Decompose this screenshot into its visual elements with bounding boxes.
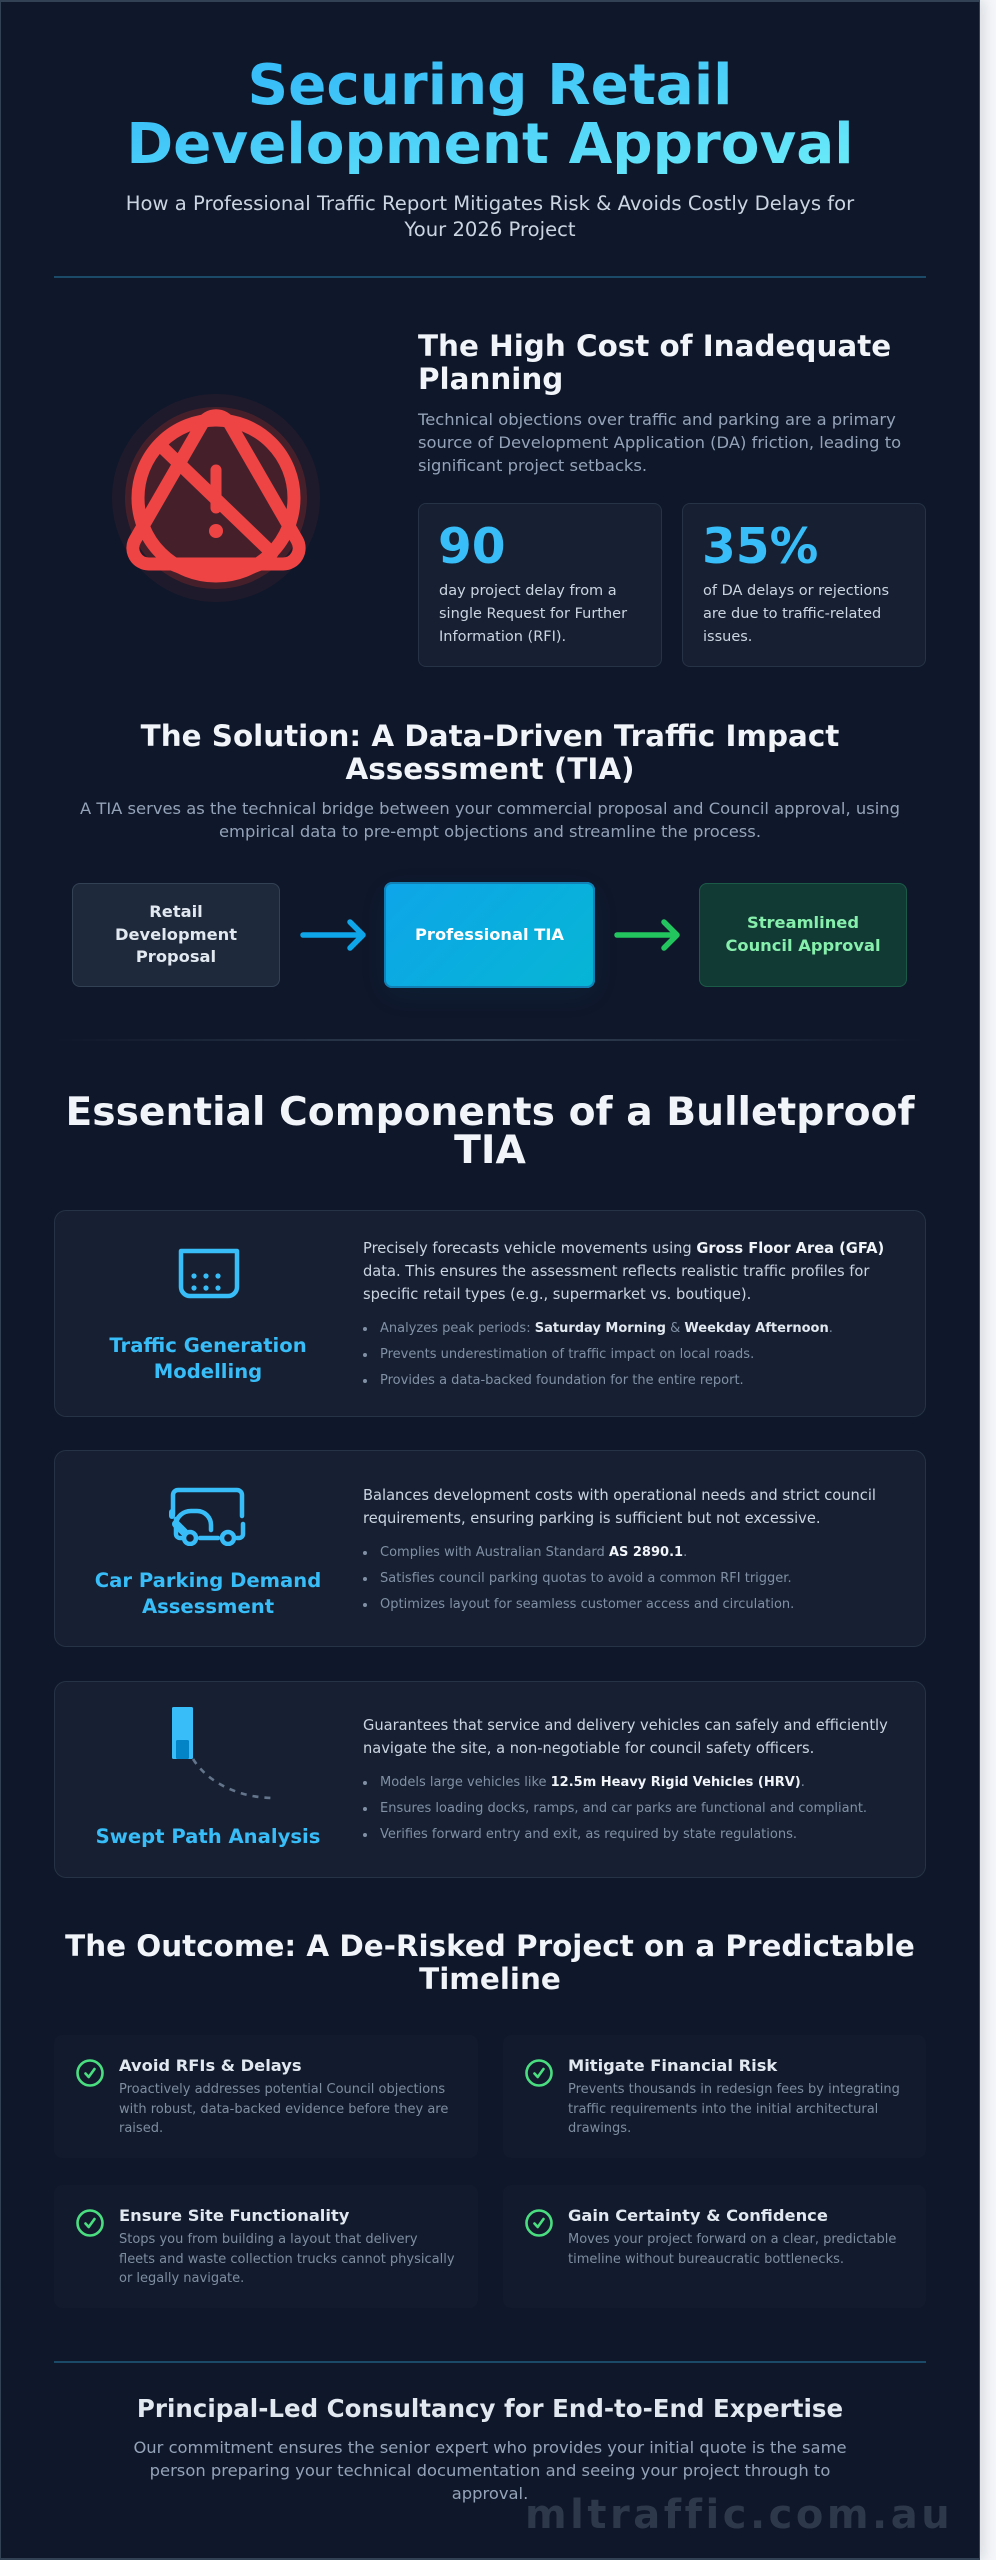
outcome text bbox=[568, 2232, 896, 2267]
header bbox=[126, 53, 854, 241]
flow step: retail proposal: Development bbox=[115, 925, 237, 944]
panel: avoid RFIs bbox=[54, 2035, 478, 2158]
heading: The Solution: A Data-Driven Traffic Impact bbox=[141, 719, 839, 753]
card body: specific retail types (e.g., supermarket vs. boutique). bbox=[363, 1286, 751, 1303]
stat text bbox=[703, 583, 889, 645]
heading: Planning bbox=[418, 362, 563, 396]
heading: Assessment (TIA) bbox=[345, 752, 634, 786]
flow step: council approval bbox=[699, 883, 907, 987]
subtitle: Your 2026 Project bbox=[404, 218, 576, 241]
stat text: of DA delays or rejections bbox=[703, 583, 889, 599]
card title: Swept Path Analysis bbox=[96, 1825, 320, 1848]
card body: Guarantees that service and delivery vehicles can safely and efficiently bbox=[363, 1717, 888, 1734]
flow step: retail proposal bbox=[72, 883, 280, 987]
bullet: Prevents underestimation of traffic impact on local roads. bbox=[380, 1347, 754, 1362]
icon: parked car bbox=[169, 1488, 246, 1546]
card title: Assessment bbox=[142, 1595, 274, 1618]
watermark: mltraffic.com.au bbox=[525, 2492, 953, 2538]
outcome text: with robust, data-backed evidence before they are bbox=[119, 2102, 448, 2117]
panel: car parking demand assessment bbox=[54, 1450, 926, 1647]
heading: the outcome: The Outcome: A De-Risked Project on a Predictable bbox=[65, 1929, 915, 1963]
bullet: Provides a data-backed foundation for the entire report. bbox=[380, 1373, 744, 1388]
flow step: retail proposal: Proposal bbox=[136, 947, 216, 966]
card title: Car Parking Demand bbox=[95, 1569, 321, 1592]
card title bbox=[95, 1569, 321, 1618]
icon: swept path bbox=[172, 1707, 270, 1800]
card title: Modelling bbox=[154, 1360, 262, 1383]
card body: navigate the site, a non-negotiable for council safety officers. bbox=[363, 1740, 814, 1757]
heading: The High Cost of Inadequate bbox=[418, 329, 891, 363]
outcome title: Mitigate Financial Risk bbox=[568, 2056, 777, 2075]
panel: gain certainty bbox=[503, 2185, 926, 2308]
bullet: Satisfies council parking quotas to avoid a common RFI trigger. bbox=[380, 1571, 792, 1586]
title bbox=[0, 56, 980, 174]
subtitle bbox=[126, 192, 854, 241]
outcome text bbox=[119, 2082, 448, 2136]
panel: mitigate financial risk bbox=[503, 2035, 926, 2158]
card body: Precisely forecasts vehicle movements using Gross Floor Area (GFA) bbox=[363, 1240, 884, 1257]
panel: the solution bbox=[72, 719, 907, 988]
flow step: council approval: Streamlined bbox=[747, 913, 859, 932]
outcome text: Prevents thousands in redesign fees by integrating bbox=[568, 2082, 900, 2097]
description: empirical data to pre-empt objections and streamline the process. bbox=[219, 822, 761, 841]
stat text: issues. bbox=[703, 629, 752, 645]
card body: requirements, ensuring parking is sufficient but not excessive. bbox=[363, 1510, 821, 1527]
description: significant project setbacks. bbox=[418, 456, 647, 475]
stat number: 35% bbox=[702, 519, 818, 575]
card body bbox=[363, 1487, 876, 1527]
stat card: 35 percent bbox=[682, 503, 926, 667]
card body bbox=[363, 1717, 888, 1757]
title: Development Approval bbox=[126, 112, 854, 177]
icon: check bbox=[76, 2059, 104, 2087]
heading: the outcome: Timeline bbox=[419, 1962, 561, 1996]
bullet: Verifies forward entry and exit, as required by state regulations. bbox=[380, 1827, 797, 1842]
outcome text: traffic requirements into the initial architectural bbox=[568, 2102, 878, 2117]
arrow: blue bbox=[300, 919, 366, 951]
outcome text: raised. bbox=[119, 2121, 163, 2136]
heading: essential components: Essential Components of a Bulletproof bbox=[65, 1090, 915, 1135]
bullet: Analyzes peak periods: Saturday Morning & Weekday Afternoon. bbox=[380, 1321, 833, 1336]
card title: Traffic Generation bbox=[109, 1334, 307, 1357]
heading bbox=[140, 719, 839, 786]
flow step: retail proposal: Retail bbox=[149, 902, 203, 921]
card body: Balances development costs with operational needs and strict council bbox=[363, 1487, 876, 1504]
description bbox=[418, 410, 901, 475]
footer heading: Principal-Led Consultancy for End-to-End Expertise bbox=[137, 2394, 843, 2423]
heading: essential components: TIA bbox=[454, 1128, 526, 1173]
footer text bbox=[133, 2438, 847, 2503]
outcome text: fleets and waste collection trucks cannot physically bbox=[119, 2252, 455, 2267]
outcome title: Gain Certainty & Confidence bbox=[568, 2206, 828, 2225]
stat number: 90 bbox=[438, 519, 506, 575]
title: Securing Retail bbox=[247, 53, 733, 118]
bullet: Ensures loading docks, ramps, and car parks are functional and compliant. bbox=[380, 1801, 867, 1816]
icon: check bbox=[525, 2209, 553, 2237]
card body bbox=[363, 1240, 884, 1303]
outcome title: Ensure Site Functionality bbox=[119, 2206, 349, 2225]
bullet: Models large vehicles like 12.5m Heavy Rigid Vehicles (HRV). bbox=[380, 1775, 805, 1790]
panel: high cost of inadequate planning bbox=[112, 329, 926, 667]
stat text bbox=[439, 583, 628, 645]
stat text: single Request for Further bbox=[439, 606, 627, 622]
outcome text: timeline without bureaucratic bottlenecks. bbox=[568, 2252, 844, 2267]
arrow: green bbox=[614, 919, 680, 951]
stat card: 90 days bbox=[418, 503, 662, 667]
icon: check bbox=[76, 2209, 104, 2237]
icon: warning triangle in prohibition circle bbox=[112, 394, 320, 602]
footer text: person preparing your technical documentation and seeing your project through to bbox=[150, 2461, 830, 2480]
panel: ensure site functionality bbox=[54, 2185, 478, 2308]
panel: swept path analysis bbox=[54, 1681, 926, 1878]
description: A TIA serves as the technical bridge between your commercial proposal and Council approval, using bbox=[80, 799, 900, 818]
icon: grid panel bbox=[178, 1248, 240, 1298]
card body: data. This ensures the assessment reflects realistic traffic profiles for bbox=[363, 1263, 869, 1280]
card title bbox=[109, 1334, 307, 1383]
icon: check bbox=[525, 2059, 553, 2087]
outcome text: Proactively addresses potential Council objections bbox=[119, 2082, 445, 2097]
heading: the outcome bbox=[65, 1929, 915, 1996]
bullet: Complies with Australian Standard AS 2890.1. bbox=[380, 1545, 687, 1560]
outcome text: or legally navigate. bbox=[119, 2271, 244, 2286]
stat text: day project delay from a bbox=[439, 583, 617, 599]
flow step: professional TIA: Professional TIA bbox=[415, 925, 564, 944]
outcome title: Avoid RFIs & Delays bbox=[119, 2056, 302, 2075]
flow step: professional TIA bbox=[384, 882, 595, 988]
bullet: Optimizes layout for seamless customer access and circulation. bbox=[380, 1597, 794, 1612]
outcome text: drawings. bbox=[568, 2121, 631, 2136]
footer text: Our commitment ensures the senior expert who provides your initial quote is the same bbox=[133, 2438, 847, 2457]
outcome text: Stops you from building a layout that delivery bbox=[119, 2232, 418, 2247]
outcome text: Moves your project forward on a clear, predictable bbox=[568, 2232, 896, 2247]
heading bbox=[418, 329, 891, 396]
footer text: approval. bbox=[452, 2484, 528, 2503]
flow step: council approval: Council Approval bbox=[725, 936, 881, 955]
stat text: are due to traffic-related bbox=[703, 606, 881, 622]
footer bbox=[133, 2394, 847, 2503]
outcome text bbox=[568, 2082, 900, 2136]
subtitle: How a Professional Traffic Report Mitigates Risk & Avoids Costly Delays for bbox=[126, 192, 854, 215]
outcome text bbox=[119, 2232, 455, 2286]
description: Technical objections over traffic and parking are a primary bbox=[418, 410, 896, 429]
description bbox=[80, 799, 900, 841]
heading: essential components bbox=[65, 1090, 915, 1173]
stat text: Information (RFI). bbox=[439, 629, 566, 645]
panel: traffic generation modelling bbox=[54, 1210, 926, 1417]
description: source of Development Application (DA) friction, leading to bbox=[418, 433, 901, 452]
